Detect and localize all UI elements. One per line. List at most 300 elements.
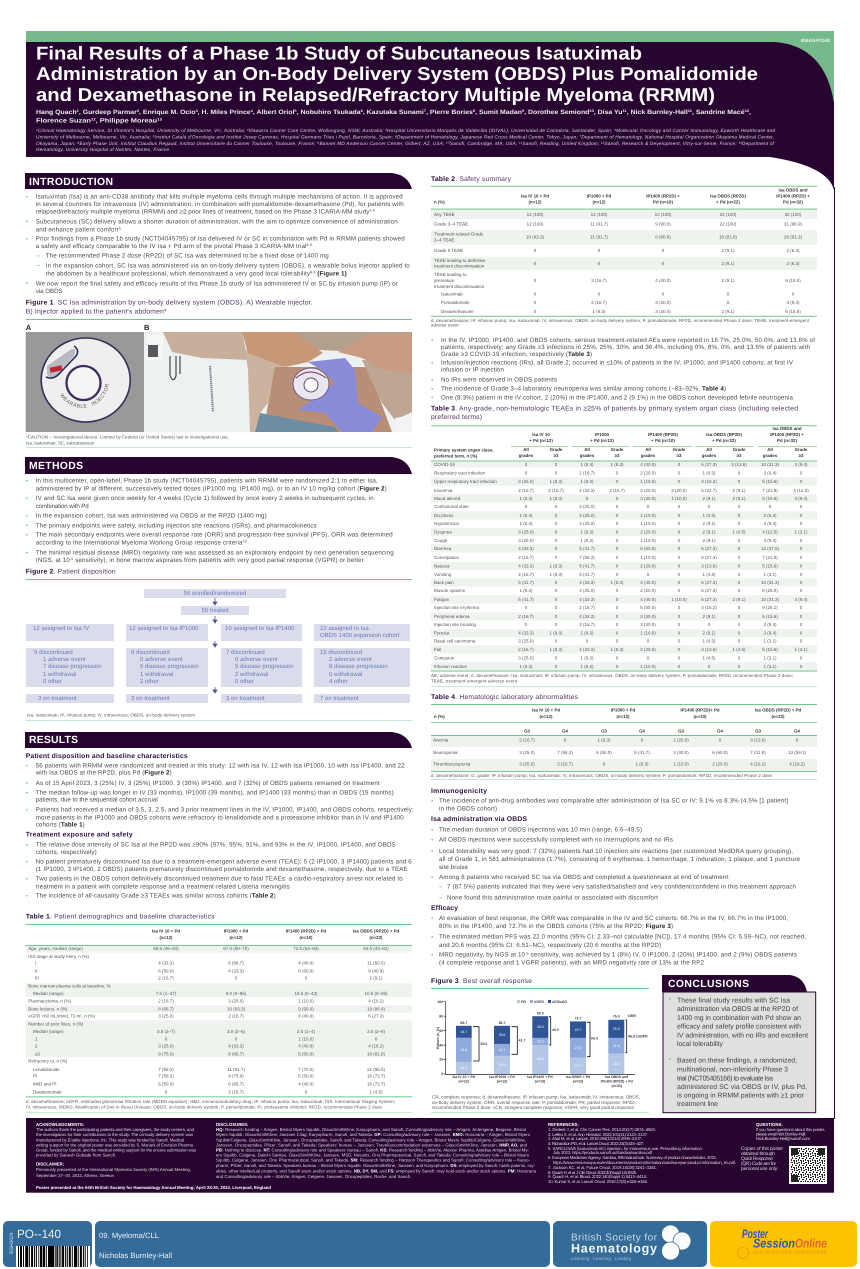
footer strip [3, 1221, 857, 1267]
table 3: 0 [738, 572, 741, 577]
table 4: 2 (20.0) [673, 738, 689, 743]
table 2: IP1400 (RP2D) + [646, 194, 680, 199]
table 2: 2 (9.1) [721, 261, 735, 266]
table 3: 0 [555, 656, 558, 661]
table 3: 0 [800, 538, 803, 543]
table 3: 6 (27.3) [701, 546, 717, 551]
x axis labels [452, 1075, 633, 1088]
table 3: 8 (25.0) [762, 588, 778, 593]
table 3: 5 (41.7) [518, 597, 534, 602]
subheading: disposition: Patient disposition and baseline characteristics [26, 753, 188, 760]
table 3: 4 (40.0) [640, 580, 656, 585]
table 1: demographics: 72.5 (63–83) [293, 946, 319, 951]
panel: immunogenicity, administration, efficacy text [431, 788, 806, 967]
table 2 footnote [431, 318, 810, 328]
table 2: 6 (18.8) [785, 278, 801, 283]
x axis labels: Isa OBDS and [605, 1075, 628, 1079]
bar chart: best overall response [436, 1000, 648, 1088]
bullets: efficacy: -5 [525, 952, 528, 956]
row: assignment boxes [26, 624, 410, 641]
table 3: 3 (9.4) [763, 521, 777, 526]
table 1: demographics: Isa OBDS (RP2D) + Pd [353, 929, 400, 934]
bar: OBDS: 22.7 [575, 1064, 581, 1068]
bar: Isa IV: 50.0 [480, 1042, 487, 1046]
table 1: demographics: II [35, 969, 38, 974]
acknowledgments: Group, funded by Sanofi, and the medical writing support for the encore submission was [36, 1148, 196, 1152]
table 2: + Pd (n=22) [716, 200, 740, 205]
bullets: introduction [26, 194, 410, 295]
table 3: 0 [525, 605, 528, 610]
authors: 7 [424, 109, 426, 113]
bullets: methods: 10 [243, 540, 247, 544]
bullets: disposition: more patients in the IP1000 and OBDS cohorts were refractory to lenalidomide and a proteasome inhibitor than in IV and IP1400 [36, 815, 404, 822]
table 4: Isa IV 10 + Pd [532, 708, 560, 713]
table 3: 0 [616, 555, 619, 560]
table 3: preferred term, n (%) [434, 453, 478, 458]
table 2: Isa OBDS and [778, 188, 808, 193]
table 3: 0 [678, 605, 681, 610]
table 3: 4 (33.3) [518, 563, 534, 568]
table 3: 10 (31.3) [761, 462, 780, 467]
table 1: demographics: III [35, 975, 39, 980]
y axis: 100 [437, 1000, 443, 1004]
table 3: 0 [678, 664, 681, 669]
table 3: 0 [555, 639, 558, 644]
table 3: Contusion [434, 656, 455, 661]
table 3: 0 [769, 504, 772, 509]
bar: IP1000: 25.0 [499, 1063, 505, 1067]
figure 1 panel A: wearable injector [26, 323, 144, 432]
table 4: G3 [601, 728, 607, 733]
table 4: G3 [755, 728, 761, 733]
table 1: demographics: 5 (50.0) [298, 1074, 314, 1079]
poster number tab [3, 1221, 92, 1267]
table 3: 0 [647, 639, 650, 644]
table 3: 0 [678, 513, 681, 518]
table 3: 1 (4.5) [702, 471, 716, 476]
y axis: 0 [441, 1072, 443, 1076]
table 3: 0 [616, 572, 619, 577]
conclusions text: treatment line [677, 1101, 718, 1108]
bullets: administration: 7 (87.5%) patients indicated that they were very satisfied/satisfied and very confident/confident in this treatment approach [447, 884, 797, 891]
right border line [834, 187, 835, 1119]
table 4: 0 [796, 738, 799, 743]
poster id: BSH24-PO140 [801, 38, 830, 43]
table 2: (n=12) [528, 200, 542, 205]
questions: Nick.Burnley-Hall@sanofi.com [756, 1136, 810, 1141]
x axis labels: (n=10) [535, 1079, 545, 1083]
table 3 footnote: TEAE, treatment-emergent adverse event [431, 678, 518, 684]
table 3: 0 [678, 631, 681, 636]
bullets: efficacy: At evaluation of best response, the ORR was comparable in the IV and SC cohorts: 66.7% in the IV, 66.7% in the IP1000, [439, 915, 788, 922]
table 3: 1 (8.3) [580, 530, 594, 535]
table 4: 3 (30.0) [673, 750, 689, 755]
logo: Poster Session Online: Online [795, 1236, 827, 1250]
table 3: 4 (18.2) [701, 605, 717, 610]
table 3: 1 (4.5) [732, 530, 746, 535]
figure 2 caption: Figure 2. Patient disposition [26, 569, 116, 576]
acknowledgments [36, 1122, 271, 1190]
table 3: All [645, 447, 651, 452]
table 3: 3 (9.4) [763, 622, 777, 627]
table 1: demographics: 3 (25.0) [158, 1044, 174, 1049]
table 2: 2 (16.7) [591, 278, 607, 283]
authors: 5 [294, 109, 297, 113]
bullets: disposition: with Isa OBDS at the RP2D, plus Pd (Figure 2) [35, 769, 172, 776]
table 3: 0 [738, 664, 741, 669]
table 4: 3 (25.0) [519, 762, 535, 767]
questions: QUESTIONS: [756, 1122, 783, 1127]
figure 1 footnote: *CAUTION – Investigational device. Limited by Federal (or United States) law to investigational use. [26, 434, 229, 439]
table 3: 0 [738, 580, 741, 585]
table 3 caption: Table 3. Any-grade, non-hematologic TEAEs in ≥25% of patients by primary system organ class (including selected [431, 405, 798, 412]
bullets: efficacy [432, 915, 806, 967]
table 3: 2 (6.3) [763, 513, 777, 518]
bullets: efficacy: 80% in the IP1400, and 72.7% in the OBDS cohorts (75% at the RP2D; Figure 3) [439, 923, 673, 930]
bullets: introduction: in several countries for intravenous (IV) administration, in combination with pomalidomide-dexamethasone (Pd), for patients with [36, 201, 404, 208]
row: discontinued boxes [26, 648, 410, 687]
table 3: 0 [678, 546, 681, 551]
table 3: 0 [678, 555, 681, 560]
table 2: Any TEAE [434, 212, 455, 217]
table 3: 0 [586, 496, 589, 501]
bullets: disposition: cohorts (Table 1) [36, 822, 85, 829]
table 4: 0 [641, 738, 644, 743]
table 3: All [767, 447, 773, 452]
table 3: 4 (40.0) [640, 597, 656, 602]
safety bullets: patients, respectively; any Grade ≥3 infections in 25%, 25%, 30%, and 36.4%, including 0%, 8%, 0%, and 13.6% of patients with [441, 344, 811, 351]
table 4: IP1400 (RP2D)+ Pd [680, 708, 720, 713]
table 3: Dizziness [434, 513, 454, 518]
bullets: efficacy: (4 complete response and 1 VGPR patients), with an MRD negativity rate of 13% at the RP2 [439, 960, 705, 967]
table 1: demographics: 1 [35, 1037, 38, 1042]
table 3: 2 (20.0) [671, 488, 687, 493]
authors: 1 [77, 109, 79, 113]
table 3: 0 [800, 664, 803, 669]
table 4: n (%) [434, 714, 445, 719]
subheading: isa administration: Isa administration via OBDS [431, 816, 527, 823]
table 3: 0 [800, 555, 803, 560]
table 3: 0 [678, 479, 681, 484]
bullets: exposure: (1 IP1000, 3 IP1400, 2 OBDS) patients prematurely discontinued pomalidomide and dexamethasone, respectively, due to a TEAE [36, 866, 408, 873]
safety bullets: In the IV, IP1000, IP1400, and OBDS cohorts, serious treatment-related AEs were reported in 16.7%, 25.0%, 50.0%, and 13.6% of [441, 337, 815, 344]
disclosures: DISCLOSURES: [216, 1122, 249, 1127]
legend: PR [521, 1000, 526, 1004]
authors: , Sandrine Macé [692, 109, 745, 116]
table 3: 0 [525, 471, 528, 476]
table 3: 1 (8.3) [580, 656, 594, 661]
table 3: 1 (4.5) [702, 656, 716, 661]
table 3: 0 [616, 614, 619, 619]
row: discontinued boxes: 7 disease progression [43, 663, 102, 670]
table 3: 0 [555, 555, 558, 560]
table 3: 5 (15.6) [762, 479, 778, 484]
session info: Nicholas Burnley-Hall [99, 1251, 172, 1260]
authors: 4 [251, 109, 253, 113]
table 3: 1 (8.3) [549, 563, 563, 568]
copies note [741, 1146, 783, 1172]
table 3: 5 (50.0) [640, 605, 656, 610]
table 3: 2 (20.0) [640, 488, 656, 493]
affiliations: Hematology, University Hospital of Nantes, Nantes, France [36, 147, 169, 152]
table 1: demographics: Bone lesions, n (%) [28, 1007, 68, 1012]
table 3: 0 [678, 622, 681, 627]
table 2: 11 (91.7) [590, 235, 608, 240]
table 3: Cough [434, 538, 448, 543]
bullets: methods: administered by IP at different, successively tested doses (IP1000 mg, IP1400 mg), or to an IV 10 mg/kg cohort (Figure 2) [36, 486, 387, 493]
table 3: 0 [525, 504, 528, 509]
box: enrolled: 56 enrolled/randomized [184, 590, 246, 597]
table 2: 0 [534, 261, 537, 266]
table 3: 1 (10.0) [640, 631, 656, 636]
figure 3 footnote [432, 1094, 640, 1110]
table 3: 0 [525, 622, 528, 627]
table 1: demographics: 69.5 (46–83) [153, 946, 179, 951]
bullets: introduction: and enhance patient comfort [36, 226, 119, 233]
table 4: 4 (18.2) [750, 762, 766, 767]
bullets: introduction: relapsed/refractory multiple myeloma (RRMM) and ≥2 prior lines of treatment, based on the Phase 3 ICARIA-MM study [36, 208, 369, 215]
bullets: efficacy: sensitivity, was achieved by 1 (8%) IV, 0 IP1000, 2 (20%) IP1400, and 2 (9%) OBDS patients [529, 952, 797, 959]
table 3: 1 (3.1) [763, 572, 777, 577]
table 3: 3 (13.6) [701, 647, 717, 652]
table 3: 2 (9.1) [702, 614, 716, 619]
table 3: 0 [555, 614, 558, 619]
table 4: 0 [564, 738, 567, 743]
table 1: demographics: 16 (72.7) [367, 1082, 386, 1087]
table 4: (n=22) [771, 714, 785, 719]
box: enrolled [144, 589, 286, 598]
table 2: 32 (100) [785, 212, 802, 217]
table 1: demographics: 6 (50.0) [158, 1082, 174, 1087]
y axis [436, 1000, 635, 1076]
table 3: 0 [738, 631, 741, 636]
table 2: 10 (83.3) [526, 235, 545, 240]
table 2: 12 (100) [527, 222, 544, 227]
table 3: 0 [738, 639, 741, 644]
figure 1 footnote [26, 434, 229, 445]
row: discontinued boxes: 6 disease progression [140, 663, 199, 670]
table 1: demographics: 0 [165, 1037, 168, 1042]
conclusions text: IV administration, with no IRs and excellent [677, 1032, 808, 1040]
table 2: Treatment-related Grade [434, 232, 484, 237]
table 3: 3 (25.0) [579, 588, 595, 593]
table 4: Isa OBDS (RP2D) + Pd [755, 708, 802, 713]
table 1: demographics: 4 (18.2) [368, 999, 384, 1004]
table 2: treatment discontinuation [434, 284, 485, 289]
authors: 13 [157, 118, 162, 122]
table 1: demographics: 1 (10.0) [298, 999, 314, 1004]
table 3: 3 (9.4) [763, 471, 777, 476]
logo: Poster Session Online: Session [753, 1236, 795, 1250]
table 3: 0 [800, 656, 803, 661]
safety bullets: infusion or IP injection [441, 367, 505, 374]
x axis labels: Isa OBDS + Pd [566, 1075, 590, 1079]
table 3: 5 (41.7) [579, 546, 595, 551]
safety bullets [432, 337, 815, 401]
table 3: Mood altered [434, 496, 461, 501]
logo: Poster Session Online [710, 1221, 857, 1267]
table 2: 0 [662, 248, 665, 253]
questions: If you have questions about this poster, [756, 1127, 825, 1132]
table 3: 4 (33.3) [518, 631, 534, 636]
row: on treatment boxes: 3 on treatment [226, 695, 265, 702]
table 1: demographics: 2 (16.7) [228, 1014, 244, 1019]
table 2: 3 (30.0) [655, 300, 671, 305]
table 3: 0 [616, 631, 619, 636]
row: discontinued boxes: 9 discontinued [131, 649, 170, 656]
row: discontinued boxes: 9 disease progression [329, 663, 388, 670]
row: on treatment boxes [26, 694, 410, 703]
logo: British Society for Haematology: Listening · Learning · Leading [571, 1256, 631, 1261]
table 3: 0 [708, 664, 711, 669]
table 4: Neutropenia [433, 750, 458, 755]
safety bullets: Infusion/injection reactions (IRs), all Grade 2, occurred in ≤10% of patients in the IV, IP1000, and IP1400 cohorts, at first IV [441, 360, 794, 367]
panel: table 4 hematologic [431, 694, 817, 780]
bullets: administration: All OBDS injections were successfully completed with no interruptions and no IRs [439, 837, 673, 844]
arrow [213, 687, 217, 693]
table 3: ≥3 [554, 453, 559, 458]
table 3: 0 [586, 639, 589, 644]
row: assignment boxes: 12 assigned to Isa IP1000 [129, 625, 199, 632]
table 3: 3 (9.4) [794, 462, 808, 467]
table 2: IP1000 + Pd [587, 194, 612, 199]
acknowledgments: The authors thank the participating patients and their caregivers, the study centers, and [36, 1127, 195, 1132]
table 1: demographics: 3.0 (2–6) [367, 1029, 386, 1034]
table 1: demographics: Plasmacytoma, n (%) [28, 999, 72, 1004]
table 1: demographics: 2 (16.7) [158, 999, 174, 1004]
panel: methods [25, 457, 412, 721]
table 2: 2 (16.7) [591, 300, 607, 305]
table 1: demographics: 64.5 (43–82) [363, 946, 389, 951]
table 2: 0 [534, 248, 537, 253]
row: assignment boxes: OBDS 1400 expansion cohort [320, 632, 400, 639]
table 1 footnote: d, dexamethasone; eGFR, estimated glomerular filtration rate (MDRD equation); IMiD, immunomodulatory drug; IP, infusion pump; Isa, isatuximab; ISS, International Staging System; [26, 1099, 395, 1104]
table 2: treatment discontinuation [434, 264, 485, 269]
icon: QR code [789, 1146, 827, 1184]
table 3: 0 [616, 656, 619, 661]
references: 10. Kumar S, et al. Lancet Oncol. 2016;17(8):e328–e346. [548, 1179, 648, 1184]
table 2: 11 (91.7) [590, 222, 608, 227]
table 3: 0 [616, 588, 619, 593]
conclusions text: administration via OBDS at the RP2D of [677, 1006, 798, 1013]
table 3: 1 (10.0) [640, 538, 656, 543]
figure 1 caption [26, 300, 313, 315]
bar: OBDS and IP1400: 25.0 [613, 1027, 620, 1031]
bullets: methods: according to the International Myeloma Working Group response criteria [36, 540, 242, 547]
authors: 11 [688, 109, 692, 113]
bullets: introduction: The recommended Phase 2 dose (RP2D) of SC Isa was determined to be a fixed dose of 1400 mg [46, 253, 329, 260]
table 3: 6 (27.3) [701, 588, 717, 593]
table 3: 1 (4.5) [702, 513, 716, 518]
table 3: 2 (16.7) [518, 647, 534, 652]
row: discontinued boxes: 1 adverse event [43, 656, 86, 663]
table 3: All [523, 447, 529, 452]
table 1: demographics: 1 (10.0) [298, 1037, 314, 1042]
authors: 8 [473, 109, 475, 113]
authors: 11 [623, 109, 627, 113]
table 2: 12 (100) [591, 212, 608, 217]
bullets: introduction: 8,9 [306, 243, 312, 247]
bar: OBDS and IP1400 [608, 1014, 648, 1074]
table 4: (n=12) [616, 714, 630, 719]
bullets: exposure: No patient prematurely discontinued Isa due to a treatment-emergent adverse event (TEAE); 5 (2 IP1000, 3 IP1400) patients and 6 [36, 859, 412, 866]
affiliations: University of Melbourne, Melbourne, Vic, Australia; ⁵Institut Català d'Oncologia and Institut Josep Carreras, Hospital Germans Trias i Pujol, Barcelona, Spain; ⁶Department of Hematology, Japanese Red Cross Medical Center, Tokyo, Japan; ⁷Department of Hematology, National Hospital Organization Okayama Medical Center, [36, 134, 774, 140]
table 3: ≥3 [737, 453, 742, 458]
table 3: 7 (21.9) [762, 488, 778, 493]
bullets: methods: sensitivity), in bone marrow aspirates from patients with very good partial response (VGPR) or better [73, 557, 364, 564]
table 3: 0 [678, 588, 681, 593]
table 1: demographics: 9 (75.0) [158, 1052, 174, 1057]
bar: IP1000 [494, 1021, 525, 1074]
table 2: 31 (96.9) [784, 222, 803, 227]
table 3: 1 (4.5) [702, 639, 716, 644]
table 2: 2 (6.3) [786, 248, 800, 253]
figure 1 caption: Figure 1. SC Isa administration by on-body delivery system (OBDS). A) Wearable injector. [26, 300, 313, 307]
table 3: IP1400 (RP2D) [648, 432, 678, 437]
table 2: Grade 5 TEAE [434, 248, 463, 253]
table 1: demographics: 2 [35, 1044, 38, 1049]
table 3: 1 (10.0) [640, 479, 656, 484]
disclosures: Squibb, Celgene, Janssen, Ono Pharmaceutical, Sanofi, and Takeda. SM: Research funding – Harpoon Therapeutics and Sanofi; Consulting/advisory role – Karyo- [216, 1158, 531, 1162]
bullets: introduction: 5 [119, 226, 121, 230]
table 3: 2 (16.7) [579, 605, 595, 610]
conclusions text: 1400 mg in combination with Pd show an [677, 1015, 801, 1022]
table 3: Upper respiratory tract infection [434, 479, 497, 484]
bullets: exposure: treatment in a patient with complete response and a treatment-related Listeria meningitis [36, 884, 290, 891]
legend: ≥CR/sCR [552, 1000, 567, 1004]
table 3: 2 (20.0) [640, 471, 656, 476]
table 3: 2 (16.7) [579, 622, 595, 627]
arrow [213, 616, 217, 623]
figure 1 caption: B) Injector applied to the patient's abdomen* [26, 308, 167, 315]
row: discontinued boxes: 5 disease progression [235, 663, 294, 670]
table 3: 0 [616, 530, 619, 535]
bullets: methods: (NGS, at 10 [36, 557, 70, 564]
bullets: methods: In this multicenter, open-label, Phase 1b study (NCT04045795), patients with RRMM were randomized 2:1 to either Isa, [36, 478, 378, 485]
table 3: 1 (8.3) [580, 462, 594, 467]
table 1: demographics: 18 (81.8) [367, 1052, 386, 1057]
table 1: demographics: 2.5 (1–4) [297, 1029, 316, 1034]
table 3: Peripheral edema [434, 614, 470, 619]
authors: , Disa Yu [594, 109, 623, 116]
table 1: demographics: 4 (40.0) [298, 1044, 314, 1049]
table 3: + Pd (n=12) [529, 438, 553, 443]
table 3: 0 [616, 622, 619, 627]
table 3: Insomnia [434, 488, 453, 493]
bullets: methods: The minimal residual disease (MRD) negativity rate was assessed as an exploratory endpoint by next generation sequencing [36, 550, 394, 557]
table 3: 2 (16.7) [579, 471, 595, 476]
table 1: demographics: 18.5 (0–43) [294, 991, 318, 996]
copies note: Copies of this poster [741, 1146, 783, 1152]
row: assignment boxes: 12 assigned to Isa IV [33, 625, 89, 632]
bullets: efficacy: MRD negativity, by NGS at 10 [439, 952, 525, 959]
bar: IP1400: 40.0 [537, 1057, 544, 1061]
table 3: 0 [555, 462, 558, 467]
table 3: Respiratory tract infection [434, 471, 486, 476]
figure 1 panel A: wearable injector: A [26, 323, 32, 332]
authors: , H. Miles Prince [198, 109, 251, 116]
conclusions text: trial (NCT05405166) to evaluate Isa [677, 1076, 773, 1082]
row: assignment boxes: 10 assigned to Isa IP1400 [225, 625, 295, 632]
table 2: Isatuximab [441, 292, 463, 297]
table 1: demographics: IP1000 + Pd [224, 929, 249, 934]
table 1: demographics: 8 (66.7) [228, 961, 244, 966]
authors: Hang Quach [36, 109, 72, 116]
table 3: 0 [738, 588, 741, 593]
table 3: 2 (16.7) [518, 555, 534, 560]
table 2: 0 [598, 292, 601, 297]
table 2: (n=12) [592, 200, 606, 205]
